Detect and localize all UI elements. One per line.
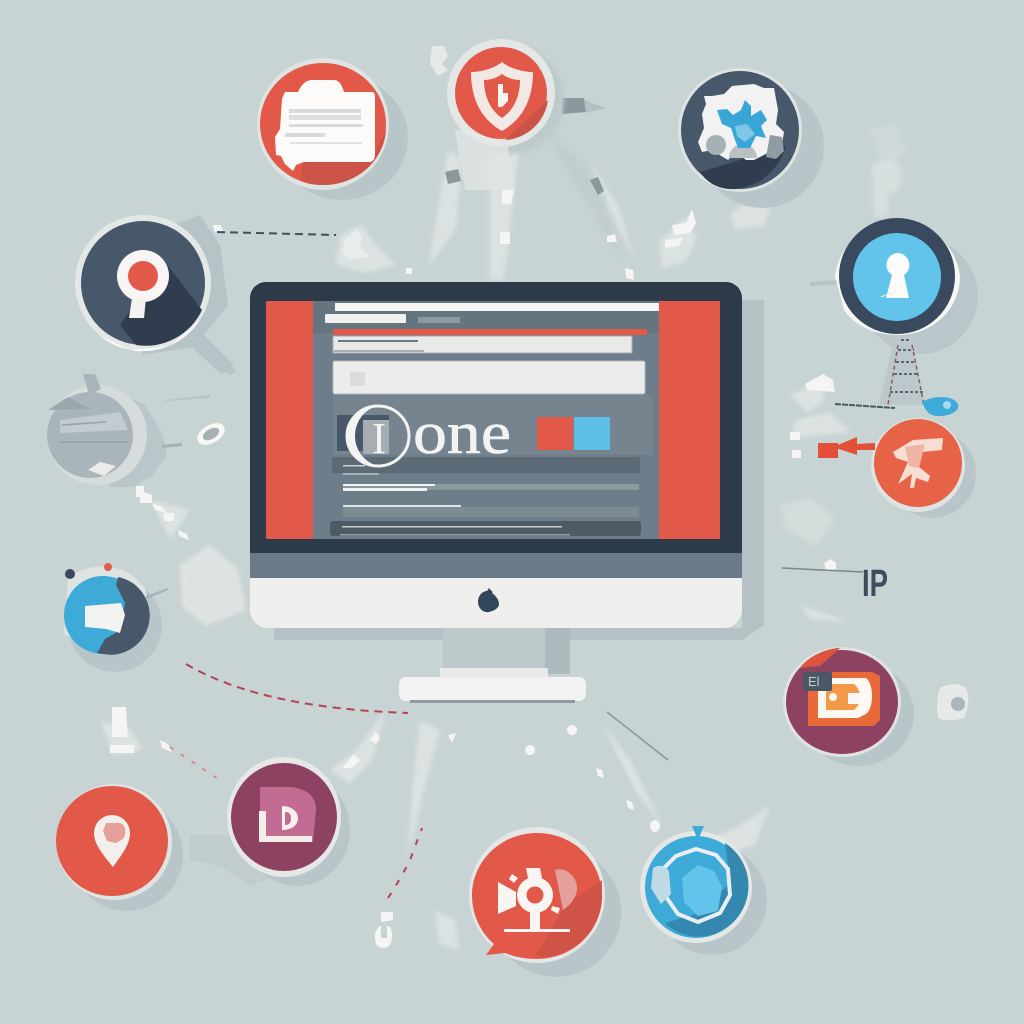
content rows: [330, 457, 641, 536]
second input box: [333, 361, 645, 394]
monitor shadow: [274, 300, 764, 640]
logo: Done: I: [372, 414, 386, 463]
grey fragments: [445, 98, 606, 195]
arrow: [818, 437, 875, 458]
first input box: [333, 336, 632, 353]
monitor body: [250, 282, 742, 628]
icon: purple image badge: El: [808, 674, 820, 689]
icon: antenna tower: [835, 335, 958, 416]
icon: map pin badge: [56, 784, 183, 911]
icon: blue network badge: [640, 826, 767, 955]
red bar: [333, 329, 647, 335]
monitor stand: [399, 628, 586, 703]
address bar: [335, 303, 659, 311]
ghost connector shapes: [100, 46, 968, 950]
icon: grey gear badge: [47, 374, 228, 487]
icon: shield badge: [447, 39, 564, 190]
icon: document badge: [257, 58, 408, 200]
label: IP: IP: [862, 563, 888, 605]
icon: gear badge: [678, 68, 824, 208]
connector: IP line: [782, 568, 863, 572]
logo: Done: [337, 400, 511, 466]
screen: [266, 301, 720, 539]
small ring: [162, 419, 228, 449]
connector: dark dashed top left: [217, 232, 336, 235]
connector: red dashed bottom left: [186, 664, 408, 713]
small white fragments: [110, 46, 968, 948]
icon: apple logo: [478, 588, 499, 612]
icon: keyhole badge: [835, 218, 978, 354]
icon: magnifier badge: [75, 215, 234, 375]
red square: [537, 417, 573, 450]
icon: blue chat badge: [64, 563, 168, 672]
connector: bottom vertical dashes: [388, 828, 422, 898]
icon: purple letter badge: [190, 757, 350, 886]
logo: Done: one: [413, 400, 511, 466]
monitor: [250, 282, 764, 703]
blue square: [574, 417, 610, 450]
connector: antenna line lower centre right: [607, 712, 668, 760]
icon: speech bubble gear badge: [469, 827, 621, 977]
icon: purple image badge: [783, 647, 914, 766]
connector: red dots bottom left: [170, 747, 224, 783]
tab: [325, 314, 406, 323]
icon: orange tool badge: [818, 418, 976, 518]
